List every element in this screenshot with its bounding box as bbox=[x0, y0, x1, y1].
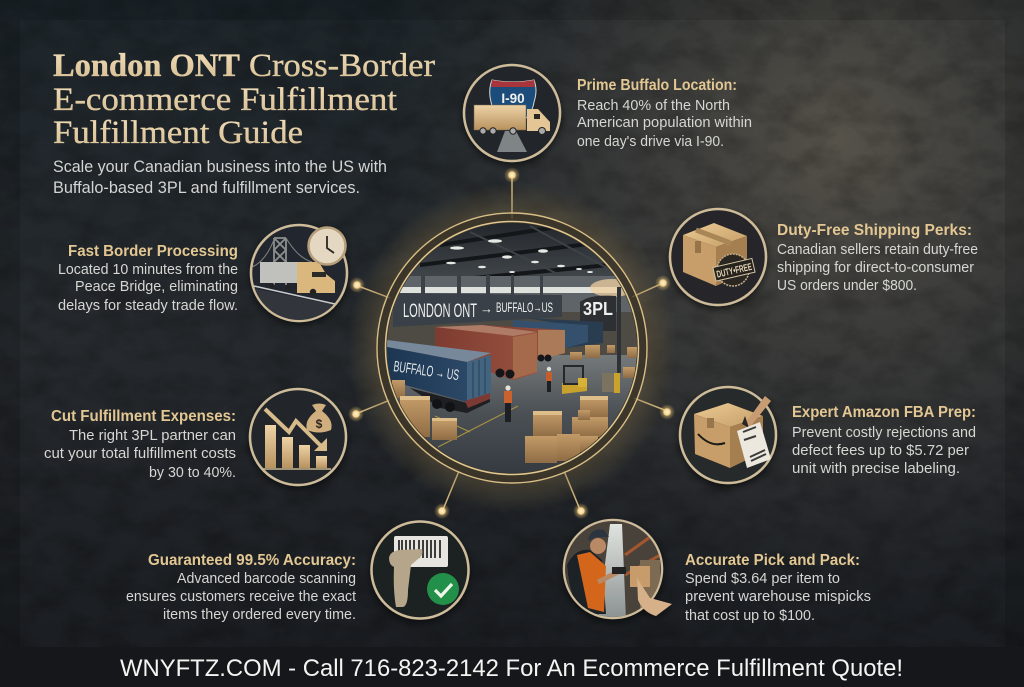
text: fast border processing: Peace Bridge, eliminating bbox=[75, 279, 238, 295]
subtitle bbox=[53, 158, 387, 197]
icon: warehouse worker picking an item bbox=[560, 520, 672, 620]
central warehouse photo medallion bbox=[347, 183, 677, 513]
title block bbox=[53, 48, 435, 197]
icon: Amazon box with shipping label bbox=[680, 387, 776, 483]
footer call-to-action bar: WNYFTZ.COM - Call 716-823-2142 For An Ecommerce Fulfillment Quote! bbox=[120, 655, 903, 682]
subtitle: Scale your Canadian business into the US with bbox=[53, 158, 387, 176]
text: duty-free shipping perks: Duty-Free Shipping Perks: bbox=[777, 222, 972, 239]
text: guaranteed accuracy: ensures customers receive the exact bbox=[126, 589, 356, 605]
heading: London ONT bbox=[53, 48, 240, 84]
icon: I-90 highway shield and truck bbox=[464, 65, 560, 161]
text: fast border processing bbox=[58, 243, 238, 314]
overhead sign: 3PL bbox=[583, 299, 613, 319]
connector lines and glowing dots bbox=[348, 167, 675, 519]
text: duty-free shipping perks: Canadian sellers retain duty-free bbox=[777, 242, 978, 258]
text: cut fulfillment expenses bbox=[44, 408, 236, 481]
overhead sign: → bbox=[480, 301, 493, 316]
text: expert Amazon FBA prep: Expert Amazon FBA Prep: bbox=[792, 404, 976, 421]
icon: falling cost chart and money bag: $ bbox=[316, 417, 323, 431]
subtitle: Buffalo-based 3PL and fulfillment services. bbox=[53, 179, 360, 197]
text: guaranteed accuracy bbox=[126, 552, 356, 623]
text: cut fulfillment expenses: Cut Fulfillment Expenses: bbox=[51, 408, 236, 425]
text: expert Amazon FBA prep: defect fees up to $5.72 per bbox=[792, 443, 969, 459]
floor markings bbox=[435, 406, 518, 447]
text: prime Buffalo location: one day's drive via I-90. bbox=[577, 134, 724, 150]
icon: duty-free cardboard box: DUTY•FREE bbox=[716, 262, 753, 281]
text: expert Amazon FBA prep bbox=[792, 404, 976, 477]
overhead sign bbox=[393, 293, 616, 331]
text: fast border processing: Fast Border Processing bbox=[68, 243, 238, 260]
blue trailer with BUFFALO US lettering: BUFFALO → US bbox=[392, 358, 460, 384]
text: fast border processing: delays for steady trade flow. bbox=[58, 298, 238, 314]
icon: duty-free cardboard box bbox=[670, 209, 766, 305]
icon: barcode scanner with green check bbox=[372, 522, 468, 618]
text: accurate pick and pack: Spend $3.64 per item to bbox=[685, 571, 840, 587]
background containers bbox=[435, 318, 603, 380]
text: duty-free shipping perks: shipping for direct-to-consumer bbox=[777, 260, 974, 276]
heading: Cross-Border bbox=[249, 48, 435, 84]
heading: E-commerce Fulfillment bbox=[53, 82, 397, 118]
text: cut fulfillment expenses: cut your total fulfillment costs bbox=[44, 446, 236, 462]
text: guaranteed accuracy: Guaranteed 99.5% Accuracy: bbox=[148, 552, 356, 569]
footer call-to-action bar bbox=[0, 647, 1024, 687]
overhead sign: LONDON ONT bbox=[403, 301, 477, 322]
text: accurate pick and pack bbox=[685, 552, 871, 624]
text: guaranteed accuracy: items they ordered every time. bbox=[163, 607, 356, 623]
heading bbox=[53, 48, 435, 151]
icon: I-90 highway shield and truck: I-90 bbox=[501, 91, 525, 106]
text: prime Buffalo location bbox=[577, 77, 752, 150]
text: accurate pick and pack: prevent warehouse mispicks bbox=[685, 589, 871, 605]
stacked cardboard boxes bbox=[392, 345, 637, 463]
text: prime Buffalo location: Prime Buffalo Location: bbox=[577, 77, 737, 94]
text: prime Buffalo location: American population within bbox=[577, 115, 752, 131]
icon: falling cost chart and money bag bbox=[250, 389, 346, 485]
text: expert Amazon FBA prep: Prevent costly rejections and bbox=[792, 425, 976, 441]
overhead sign: BUFFALO→US bbox=[496, 299, 553, 315]
text: duty-free shipping perks bbox=[777, 222, 978, 294]
text: expert Amazon FBA prep: unit with precise labeling. bbox=[792, 461, 960, 477]
text: accurate pick and pack: that cost up to $100. bbox=[685, 608, 815, 624]
text: cut fulfillment expenses: The right 3PL partner can bbox=[69, 428, 236, 444]
text: duty-free shipping perks: US orders under $800. bbox=[777, 278, 917, 294]
icon: bridge, truck and clock bbox=[250, 225, 347, 322]
text: accurate pick and pack: Accurate Pick and Pack: bbox=[685, 552, 860, 569]
blue trailer with BUFFALO US lettering bbox=[387, 340, 491, 413]
text: prime Buffalo location: Reach 40% of the North bbox=[577, 98, 730, 114]
warehouse scene bbox=[387, 223, 637, 473]
text: cut fulfillment expenses: by 30 to 40%. bbox=[149, 465, 236, 481]
text: fast border processing: Located 10 minutes from the bbox=[58, 262, 238, 278]
workers and forklift bbox=[504, 366, 587, 422]
heading: Fulfillment Guide bbox=[53, 115, 303, 151]
text: guaranteed accuracy: Advanced barcode scanning bbox=[177, 571, 356, 587]
